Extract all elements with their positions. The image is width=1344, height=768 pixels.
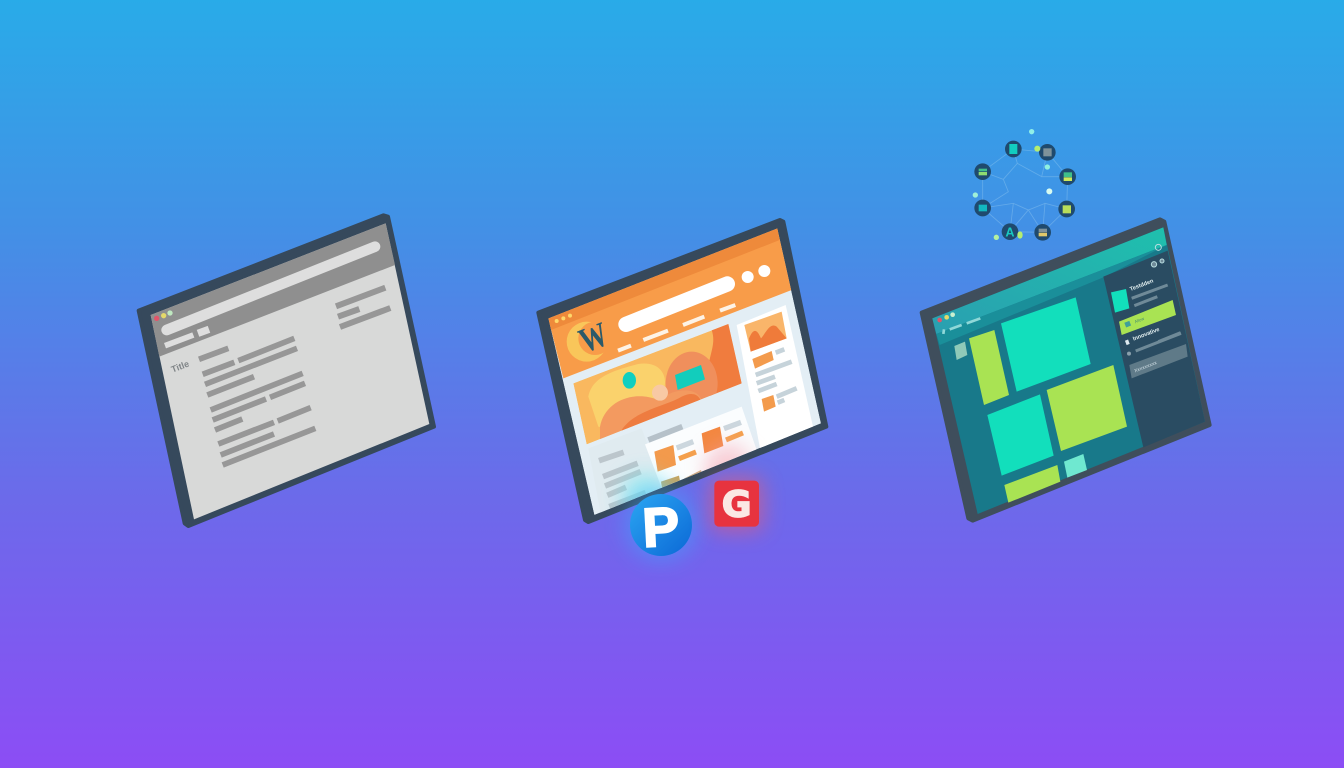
layout blocks xyxy=(954,297,1127,503)
nav items xyxy=(165,329,209,346)
panel: teal dashboard screen xyxy=(922,219,1210,521)
icon: P badge xyxy=(630,494,692,559)
connecting lines xyxy=(983,149,1068,232)
sidebar items xyxy=(752,349,797,412)
device frame xyxy=(538,220,826,522)
search pill xyxy=(626,284,727,324)
icon: G badge glow xyxy=(710,477,763,532)
icon: P badge: P xyxy=(641,495,681,559)
secondary bar xyxy=(936,245,1167,345)
window dots xyxy=(555,314,572,323)
device frame xyxy=(139,215,434,526)
glowing dots xyxy=(973,129,1052,240)
bottom left panel xyxy=(600,488,662,512)
top bar xyxy=(932,227,1167,334)
header links xyxy=(618,305,735,351)
device frame xyxy=(922,219,1210,521)
address bar xyxy=(167,247,375,330)
diagram: circular network of app icons xyxy=(973,129,1076,241)
page body xyxy=(548,228,821,515)
header buttons xyxy=(742,265,770,283)
right panel xyxy=(1103,251,1205,447)
header bar xyxy=(151,223,395,357)
title label: Title xyxy=(170,359,190,375)
icon: G badge: G xyxy=(722,485,751,526)
panel item: grey action box: Xxxxxxxxx xyxy=(1134,360,1158,373)
window dots xyxy=(937,312,955,322)
screen xyxy=(932,227,1205,514)
panel item: settings xyxy=(1125,327,1181,356)
orange header xyxy=(548,228,792,378)
bottom product card xyxy=(645,407,757,497)
node icons: A xyxy=(1005,226,1015,240)
window dots xyxy=(154,310,173,321)
panel item: settings: Innovative xyxy=(1132,327,1161,343)
panel: plain website screen xyxy=(139,215,434,526)
panel item: profile: Testdden xyxy=(1129,278,1155,293)
header top strip xyxy=(548,228,780,330)
body text lines xyxy=(199,338,315,465)
icon: P badge glow xyxy=(624,488,698,562)
panel item: green button xyxy=(1119,300,1176,335)
sidebar lines xyxy=(336,288,390,327)
hero image xyxy=(574,324,742,444)
nodes xyxy=(974,141,1076,241)
screen content xyxy=(548,228,821,520)
left panel lines xyxy=(599,452,646,507)
nav labels xyxy=(943,318,980,334)
glow over screen xyxy=(622,443,752,520)
WordPress logo: W xyxy=(574,314,613,360)
icon: G badge xyxy=(714,481,759,527)
screen xyxy=(151,223,429,519)
sidebar chart thumbnail xyxy=(744,312,787,352)
panel item: green button: Allow xyxy=(1134,316,1146,324)
product items xyxy=(648,422,743,497)
sidebar card xyxy=(737,305,813,448)
panel: WordPress themed website screen xyxy=(538,220,826,562)
panel item: profile xyxy=(1111,278,1168,313)
header icons xyxy=(1151,244,1164,267)
panel item: grey action box xyxy=(1129,344,1188,378)
